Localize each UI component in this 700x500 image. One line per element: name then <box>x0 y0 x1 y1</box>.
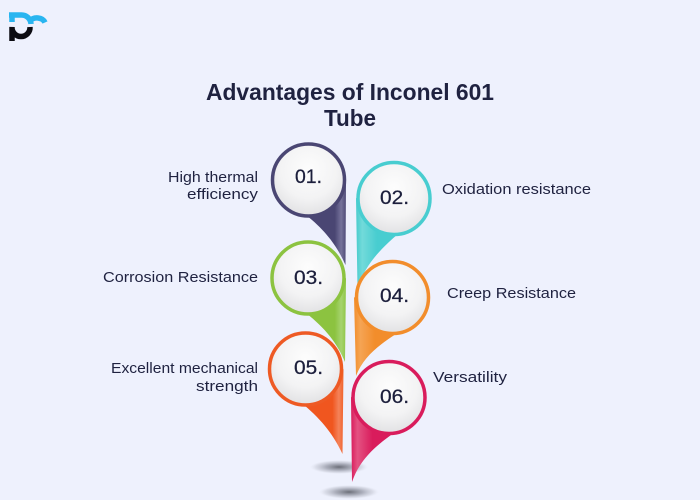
label: high thermal efficiency <box>168 169 259 203</box>
pin 05 <box>270 333 344 454</box>
pin 01 <box>272 144 346 265</box>
pin 06 <box>351 362 425 482</box>
number 05: 05. <box>294 357 323 379</box>
number 04: 04. <box>380 285 409 307</box>
label: corrosion resistance: Corrosion Resistance <box>103 269 258 286</box>
logo <box>9 15 45 41</box>
label: versatility: Versatility <box>433 369 508 386</box>
label: high thermal efficiency: efficiency <box>187 186 259 203</box>
ground shadow: pin 05 <box>310 460 368 474</box>
pin 02 <box>356 162 430 288</box>
number 02: 02. <box>380 187 409 209</box>
number 01: 01. <box>295 166 322 188</box>
label: oxidation resistance: Oxidation resistance <box>442 181 591 198</box>
pin 03 <box>272 242 346 362</box>
label: high thermal efficiency: High thermal <box>168 169 258 186</box>
number 06: 06. <box>380 386 409 408</box>
title: Tube <box>324 105 376 131</box>
label: creep resistance: Creep Resistance <box>447 285 576 302</box>
label: excellent mechanical strength: strength <box>196 378 258 395</box>
label: excellent mechanical strength: Excellent mechanical <box>111 360 258 377</box>
label: excellent mechanical strength <box>111 360 258 395</box>
pin 04 <box>354 262 428 376</box>
title <box>206 79 494 131</box>
ground shadow: pin 06 <box>319 485 379 499</box>
number 03: 03. <box>294 267 323 289</box>
title: Advantages of Inconel 601 <box>206 79 494 105</box>
